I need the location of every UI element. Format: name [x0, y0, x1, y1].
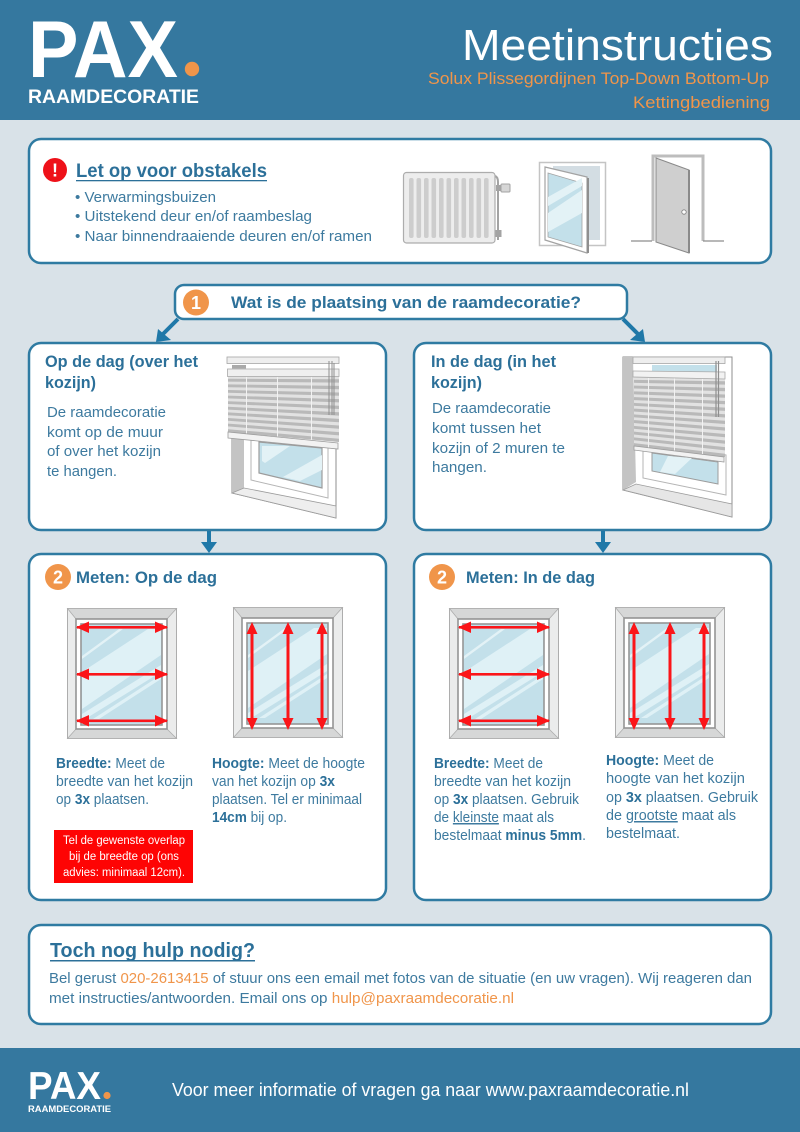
panel text: of over het kozijn: [47, 443, 161, 460]
callout: overlap: [54, 830, 193, 883]
obstacles list: • Verwarmingsbuizen: [75, 189, 216, 206]
panel text: te hangen.: [47, 463, 117, 480]
panel text: De raamdecoratie: [47, 404, 166, 421]
help text: [49, 970, 752, 1007]
heading: step 1: [175, 285, 627, 319]
panel text: [47, 404, 166, 480]
footer logo: PAX: [28, 1065, 101, 1108]
text: breedte: [56, 755, 193, 808]
diagram: height arrows: [616, 608, 724, 738]
title: Meetinstructies: [462, 21, 773, 70]
panel text: komt tussen het: [432, 420, 542, 437]
badge: 2: 2: [53, 568, 63, 588]
illustration: blind in the window: [623, 357, 732, 517]
obstacles heading: Let op voor obstakels: [76, 161, 267, 182]
panel text: kozijn of 2 muren te: [432, 440, 565, 457]
subtitle: [428, 69, 770, 112]
text: breedte: Breedte: Meet de: [434, 755, 543, 772]
diagram: height arrows: [234, 608, 342, 738]
diagram: width arrows: [68, 608, 176, 738]
panel: op de dag: [29, 343, 386, 530]
text: breedte: breedte van het kozijn: [56, 773, 193, 790]
header band: [0, 0, 800, 120]
footer logo: RAAMDECORATIE: [28, 1104, 111, 1115]
arrow: left panel to step 2: [201, 531, 217, 553]
badge: 2: 2: [437, 568, 447, 588]
text: breedte: bestelmaat minus 5mm.: [434, 827, 586, 844]
text: breedte: op 3x plaatsen.: [56, 791, 149, 808]
logo: PAX Raamdecoratie: PAX: [28, 5, 178, 95]
panel heading: kozijn): [431, 374, 482, 392]
text: hoogte: hoogte van het kozijn: [606, 770, 745, 787]
arrow: right panel to step 2: [595, 531, 611, 553]
panel text: hangen.: [432, 459, 487, 476]
text: hoogte: 14cm bij op.: [212, 809, 287, 826]
icon: open door: [631, 156, 724, 253]
heading: step 1: Wat is de plaatsing van de raamdecoratie?: [231, 293, 581, 312]
text: hoogte: [212, 755, 365, 826]
panel heading: Op de dag (over het: [45, 353, 198, 371]
text: breedte: de kleinste maat als: [434, 809, 554, 826]
logo: PAX Raamdecoratie: RAAMDECORATIE: [28, 86, 199, 108]
panel: in de dag: [414, 343, 771, 530]
arrow: step 1 to right panel: [623, 319, 645, 342]
panel heading: In de dag (in het: [431, 353, 556, 371]
text: hoogte: plaatsen. Tel er minimaal: [212, 791, 362, 808]
text: breedte: breedte van het kozijn: [434, 773, 571, 790]
footer band: [0, 1048, 800, 1132]
illustration: blind on the wall: [227, 357, 339, 518]
diagram: width arrows: [450, 608, 558, 738]
obstacles list: • Uitstekend deur en/of raambeslag: [75, 208, 312, 225]
panel heading: Meten: Op de dag: [76, 569, 217, 587]
badge: 1: 1: [191, 293, 201, 313]
callout: overlap: bij de breedte op (ons: [69, 851, 179, 863]
panel: obstacles: [29, 139, 771, 263]
text: breedte: [434, 755, 586, 844]
obstacles list: [75, 189, 372, 245]
text: hoogte: bestelmaat.: [606, 825, 680, 842]
panel text: [432, 400, 565, 476]
text: hoogte: van het kozijn op 3x: [212, 773, 336, 790]
icon: radiator: [404, 172, 510, 243]
icon: open window: [540, 162, 606, 253]
panel text: komt op de muur: [47, 424, 163, 441]
badge: 2: [429, 564, 455, 590]
callout: overlap: Tel de gewenste overlap: [63, 835, 185, 847]
arrow: step 1 to left panel: [156, 319, 178, 342]
panel heading: Meten: In de dag: [466, 569, 595, 587]
panel text: De raamdecoratie: [432, 400, 551, 417]
subtitle: Solux Plissegordijnen Top-Down Bottom-Up: [428, 69, 769, 88]
help heading: Toch nog hulp nodig?: [50, 939, 255, 962]
panel: meten op de dag: [29, 554, 386, 900]
panel: meten in de dag: [414, 554, 771, 900]
panel heading: kozijn): [45, 374, 96, 392]
text: hoogte: Hoogte: Meet de hoogte: [212, 755, 365, 772]
icon: warning: [43, 158, 67, 182]
help text: met instructies/antwoorden. Email ons op hulp@paxraamdecoratie.nl: [49, 990, 514, 1007]
text: hoogte: op 3x plaatsen. Gebruik: [606, 789, 758, 806]
footer text: Voor meer informatie of vragen ga naar www.paxraamdecoratie.nl: [172, 1080, 689, 1100]
text: hoogte: Hoogte: Meet de: [606, 752, 714, 769]
text: breedte: Breedte: Meet de: [56, 755, 165, 772]
text: hoogte: [606, 752, 758, 842]
badge: 2: [45, 564, 71, 590]
obstacles list: • Naar binnendraaiende deuren en/of ramen: [75, 228, 372, 245]
subtitle: Kettingbediening: [633, 93, 770, 112]
help text: Bel gerust 020-2613415 of stuur ons een email met fotos van de situatie (en uw vragen). Wij reageren dan: [49, 970, 752, 987]
panel heading: [45, 353, 198, 392]
callout: overlap: advies: minimaal 12cm).: [63, 867, 185, 879]
panel heading: [431, 353, 556, 392]
text: hoogte: de grootste maat als: [606, 807, 736, 824]
icon: warning: !: [52, 160, 58, 180]
badge: 1: [183, 290, 209, 316]
panel: help: [29, 925, 771, 1024]
text: breedte: op 3x plaatsen. Gebruik: [434, 791, 579, 808]
